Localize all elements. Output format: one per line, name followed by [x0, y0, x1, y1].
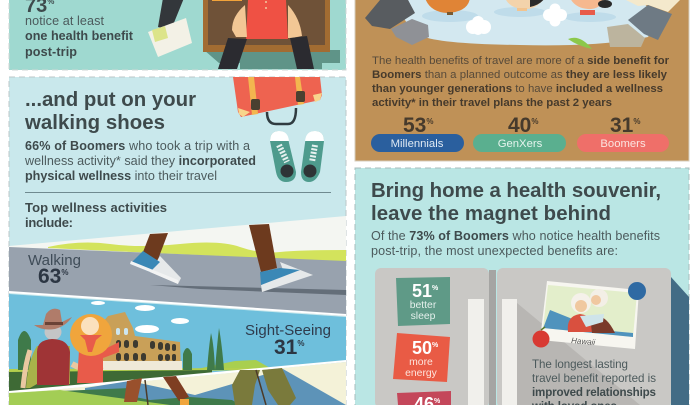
text: longest lasting benefit — [531, 358, 656, 405]
illustration: hot spring — [365, 0, 682, 49]
magnet note: 51% better sleep: better — [410, 300, 437, 311]
illustration: fridge — [375, 268, 689, 405]
panel: walking shoes — [9, 77, 346, 405]
text: notice at least one health benefit post-trip: one health benefit — [25, 29, 134, 43]
label: sight-seeing: Sight-Seeing — [245, 322, 331, 339]
stat: genxers: % — [531, 117, 538, 126]
band: walking — [9, 216, 346, 316]
photo: Hawaii: Hawaii — [571, 336, 596, 347]
text: 66% of Boomers: physical wellness into their travel — [25, 169, 217, 183]
pin — [628, 282, 646, 300]
magnet note: 51% better sleep — [396, 277, 450, 326]
magnet note: 46% — [397, 391, 451, 405]
magnet note: 50% more energy — [393, 333, 450, 382]
heading: Bring home a health souvenir, — [371, 180, 661, 202]
stat: millennials — [371, 114, 464, 152]
heading: ...and put on your — [25, 89, 196, 111]
band: hiking — [9, 362, 346, 405]
text: side benefit paragraph: The health benefits of travel are more of a side benefit for — [372, 55, 670, 67]
illustration: traveller packing suitcase — [148, 0, 340, 69]
heading — [24, 89, 196, 134]
clouds — [91, 301, 189, 333]
panel: 73 percent notice benefit — [9, 0, 346, 70]
text: intro — [371, 229, 660, 258]
icon: red suitcase — [233, 77, 322, 124]
rocks — [365, 0, 415, 29]
apple magnet — [532, 330, 550, 348]
stat: boomers: 31 — [610, 114, 633, 137]
magnet note: 50% more energy: more — [409, 357, 433, 368]
text: longest lasting benefit: travel benefit reported is — [532, 372, 656, 385]
text: side benefit paragraph: activity* in their travel plans the past 2 years — [372, 97, 612, 109]
text: intro: Of the 73% of Boomers who notice health benefits — [371, 229, 660, 243]
road label: Walking — [28, 252, 81, 269]
trees — [18, 328, 224, 370]
stat: genxers: 40 — [508, 114, 531, 137]
text: top wellness activities: Top wellness activities — [25, 200, 167, 215]
magnet note: 51% better sleep: % — [432, 285, 439, 292]
band: walking: % — [61, 268, 68, 277]
stat: boomers: Boomers — [600, 138, 646, 150]
magnet note: 50% more energy: energy — [405, 368, 438, 379]
text: longest lasting benefit: The longest lasting — [532, 358, 628, 371]
text: top wellness activities: include: — [25, 215, 73, 230]
stat: genxers — [473, 114, 566, 152]
stat: boomers: % — [633, 117, 640, 126]
illustration: tourists — [23, 309, 119, 388]
stat: millennials: 53 — [403, 114, 426, 137]
magnet note: 50% more energy: 50 — [412, 338, 432, 358]
text: intro: post-trip, the most unexpected benefits are: — [371, 244, 618, 258]
band: sight-seeing: % — [297, 339, 304, 348]
text: side benefit paragraph: Boomers than a planned outcome as they are less likely — [372, 69, 668, 81]
illustration: colosseum — [102, 312, 182, 370]
magnet note: 51% better sleep: 51 — [412, 281, 432, 301]
stat: millennials: % — [426, 117, 433, 126]
steam puffs — [466, 4, 567, 35]
heading: walking shoes — [24, 112, 165, 134]
text: side benefit paragraph — [372, 55, 670, 109]
heading: leave the magnet behind — [371, 203, 611, 225]
stat: boomers — [577, 114, 669, 152]
stat: millennials: Millennials — [391, 138, 444, 150]
band: sight-seeing: 31 — [274, 336, 297, 359]
text: notice at least one health benefit post-trip — [25, 14, 134, 59]
magnet note: 50% more energy: % — [432, 342, 439, 349]
text: 66% of Boomers: wellness activity* said they incorporated — [24, 154, 256, 168]
text: notice at least one health benefit post-trip: notice at least — [25, 14, 104, 28]
panel: health souvenir — [355, 168, 689, 405]
illustration: hiker legs — [124, 368, 296, 405]
panel: side benefit — [355, 0, 689, 161]
text: notice at least one health benefit post-trip: post-trip — [25, 45, 77, 59]
heading — [371, 180, 661, 225]
text: 66% of Boomers — [24, 139, 256, 183]
magnet note: 46%: % — [434, 398, 441, 405]
illustration: walking legs — [130, 224, 313, 292]
stat: genxers: GenXers — [498, 138, 543, 150]
band: walking: 63 — [38, 265, 61, 288]
text: 66% of Boomers: 66% of Boomers who took a trip with a — [25, 139, 250, 153]
text: top wellness activities — [25, 200, 167, 230]
icon: green sneakers — [270, 131, 324, 182]
text: longest lasting benefit: improved relationships — [532, 386, 656, 399]
band: sight-seeing — [9, 294, 346, 394]
photo: Hawaii — [532, 281, 646, 349]
text: side benefit paragraph: than younger generations to have included a wellness — [372, 83, 663, 95]
magnet note: 51% better sleep: sleep — [411, 311, 436, 322]
